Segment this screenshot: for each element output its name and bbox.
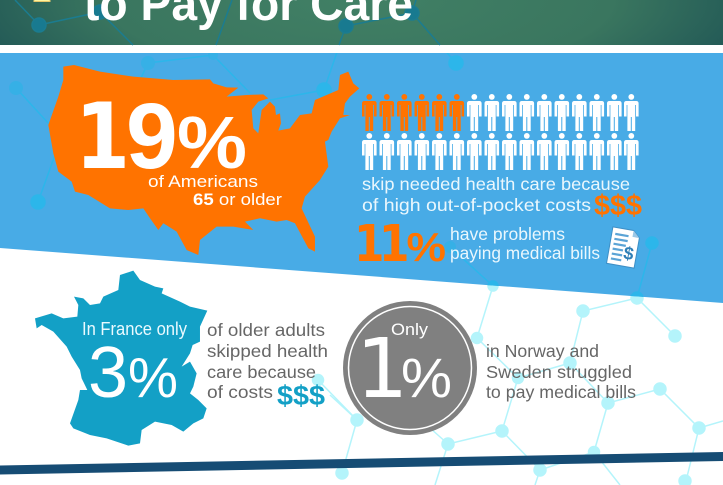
3 percent: % [128, 346, 178, 410]
3 percent [88, 333, 178, 413]
statistic: 11 percent [354, 215, 446, 274]
background network on blue [9, 53, 659, 297]
icon: orange dollar signs: $$$ [594, 190, 642, 222]
header network [15, 0, 440, 45]
statistic: 11 percent: % [406, 224, 446, 270]
text: Norway and Sweden: Sweden struggled [486, 362, 632, 382]
of Americans 65 or older: of Americans [148, 172, 258, 191]
icon: medical bill document [607, 227, 640, 268]
icon: teal dollar signs: $$$ [277, 380, 325, 411]
text: of older adults skipped health care [207, 320, 328, 402]
text: have problems paying medical bills [450, 224, 600, 263]
19 percent: 1 [75, 85, 130, 190]
footer divider bar [0, 452, 723, 474]
3 percent: 3 [88, 333, 128, 413]
text: skip needed health care: of high out-of-pocket costs [362, 195, 591, 215]
background network on white [312, 270, 723, 485]
badge: only 1 percent [343, 301, 477, 435]
19 percent: 9 [126, 84, 178, 188]
text: skip needed health care: skip needed health care because [362, 174, 630, 194]
yellow marker [34, 0, 50, 2]
icon: medical bill document: $ [622, 243, 635, 264]
statistic: 11 percent: 1 [379, 215, 410, 274]
text: have problems paying medical bills: have problems [450, 224, 565, 244]
text: skip needed health care [362, 174, 630, 215]
badge: only 1 percent: 1 [356, 322, 408, 417]
header band [0, 0, 723, 45]
statistic: 11 percent: 1 [354, 215, 384, 274]
text: Norway and Sweden [486, 341, 636, 402]
text: of older adults skipped health care: care because [207, 362, 316, 382]
text: of older adults skipped health care: skipped health [207, 341, 328, 361]
map: United States with statistic [48, 65, 359, 255]
text: have problems paying medical bills: paying medical bills [450, 243, 600, 263]
badge: only 1 percent: Only [391, 320, 429, 339]
text: Norway and Sweden: to pay medical bills [486, 382, 636, 402]
19 percent [75, 84, 247, 190]
text: of older adults skipped health care: of older adults [207, 320, 325, 340]
of Americans 65 or older [148, 172, 282, 209]
map: France with statistic [35, 271, 207, 446]
text: of older adults skipped health care: of costs [207, 382, 273, 402]
19 percent: % [177, 101, 247, 184]
pictogram: people row [362, 94, 639, 170]
text: Norway and Sweden: in Norway and [486, 341, 599, 361]
panel: blue US section [0, 53, 723, 303]
badge: only 1 percent: % [401, 346, 452, 409]
of Americans 65 or older: 65 or older [193, 190, 282, 209]
In France only: In France only [82, 319, 187, 339]
